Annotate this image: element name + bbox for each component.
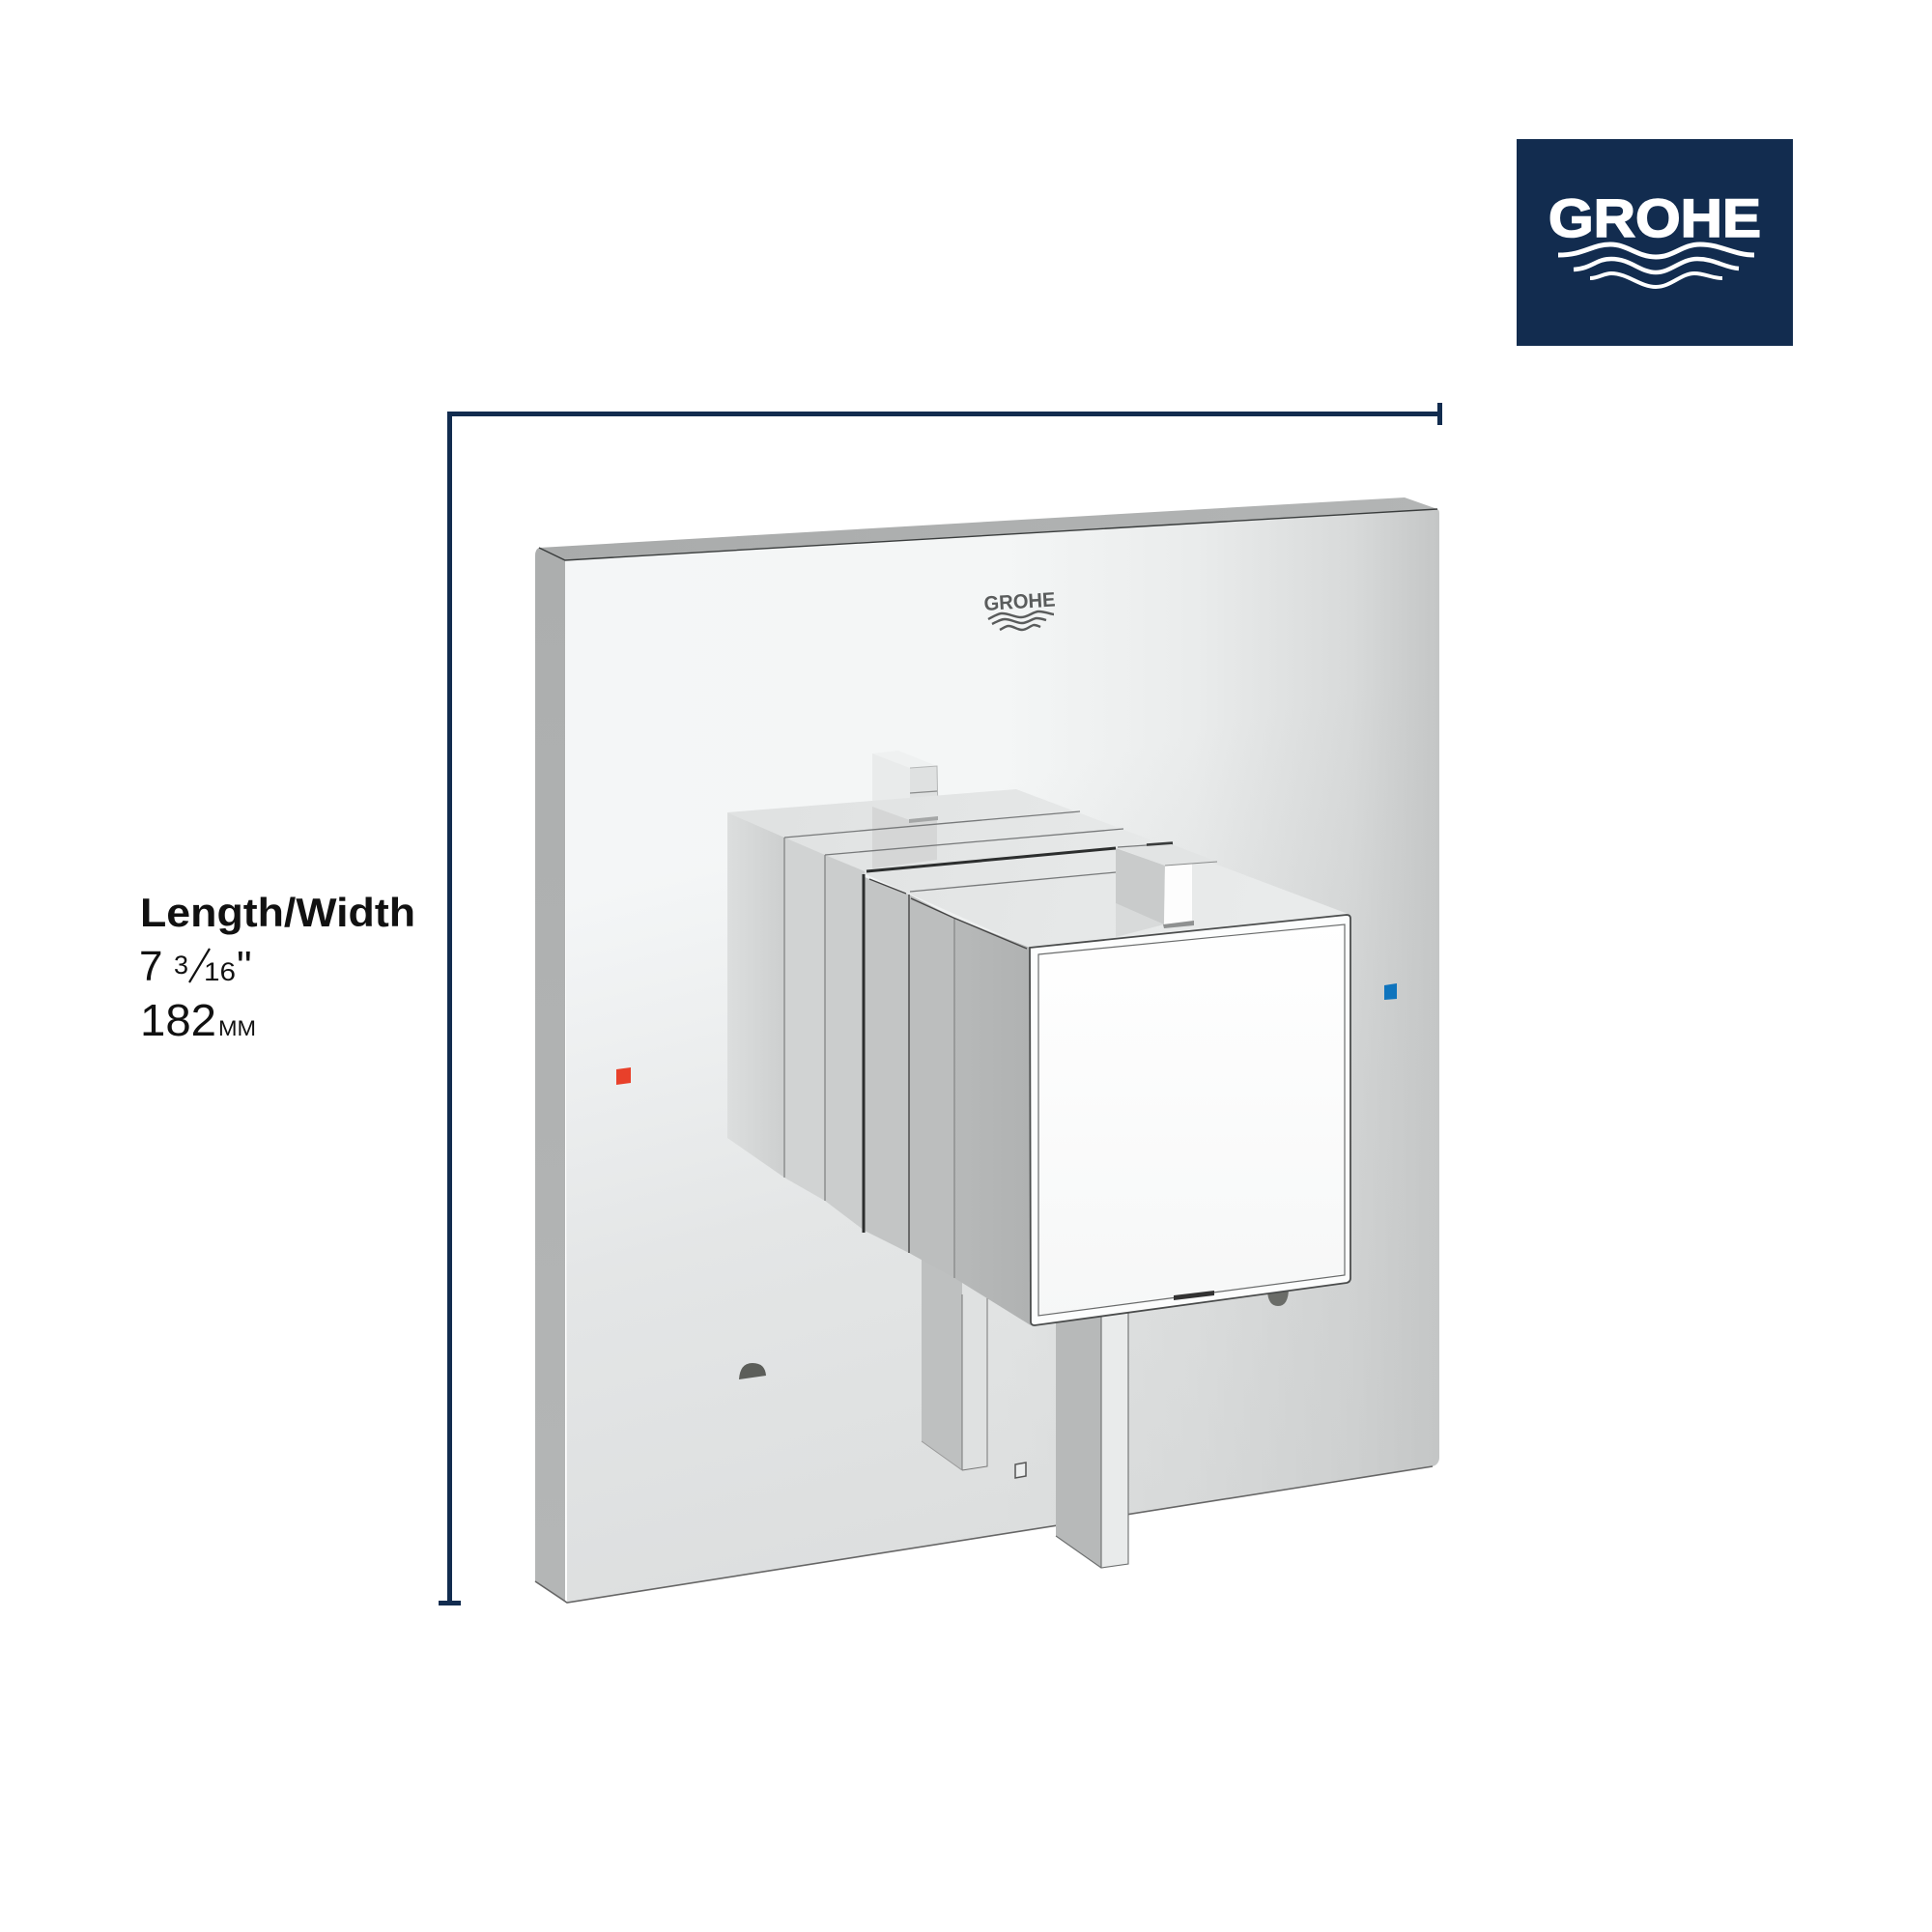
dimension bracket: width and height lines	[439, 403, 1442, 1605]
logo: engraved GROHE on plate	[983, 589, 1056, 630]
lever: top tab on knob	[1116, 844, 1217, 937]
infographic canvas	[141, 139, 1793, 1605]
text: dimension label: 7	[139, 943, 162, 990]
hole: small square outline	[1015, 1463, 1026, 1478]
marker: hot (red)	[616, 1067, 631, 1085]
logo: engraved GROHE on plate: GROHE	[983, 589, 1056, 615]
text: dimension label: 16	[204, 957, 236, 986]
tab base	[909, 816, 938, 823]
knob: thermostat handle body	[727, 789, 1350, 1325]
knob top surface	[727, 789, 1350, 948]
knob front face rim	[1030, 915, 1350, 1325]
side segment 1	[727, 812, 784, 1178]
text: dimension label	[139, 890, 415, 1045]
marker: cold (blue)	[1384, 983, 1397, 1000]
hole: lower left half-moon	[739, 1363, 766, 1379]
text: dimension label: Length/Width	[140, 890, 415, 935]
hole: right half-moon behind knob	[1267, 1288, 1289, 1306]
lever: rear lower stem	[922, 1236, 987, 1470]
text: dimension label: "	[237, 943, 252, 990]
knob inner face	[1038, 924, 1345, 1316]
text: dimension label: MM	[218, 1016, 256, 1040]
text: dimension label: 3	[174, 951, 188, 980]
product: cover plate	[535, 497, 1444, 1608]
side segment 5	[909, 895, 954, 1278]
seam lines	[784, 811, 1173, 1278]
logo: GROHE badge	[1517, 139, 1793, 346]
bottom notch	[1174, 1291, 1214, 1300]
lever: front lower stem	[1056, 1294, 1128, 1568]
side segment 4	[865, 877, 909, 1253]
reflection of rear tab on top surface	[872, 807, 937, 868]
side segment 3	[825, 855, 865, 1231]
side segment 6	[954, 918, 1031, 1325]
text: dimension label: 182	[140, 995, 216, 1045]
side segment 2	[784, 838, 825, 1201]
logo: GROHE badge: GROHE	[1548, 187, 1761, 248]
lever: rear upper tab	[872, 751, 938, 820]
